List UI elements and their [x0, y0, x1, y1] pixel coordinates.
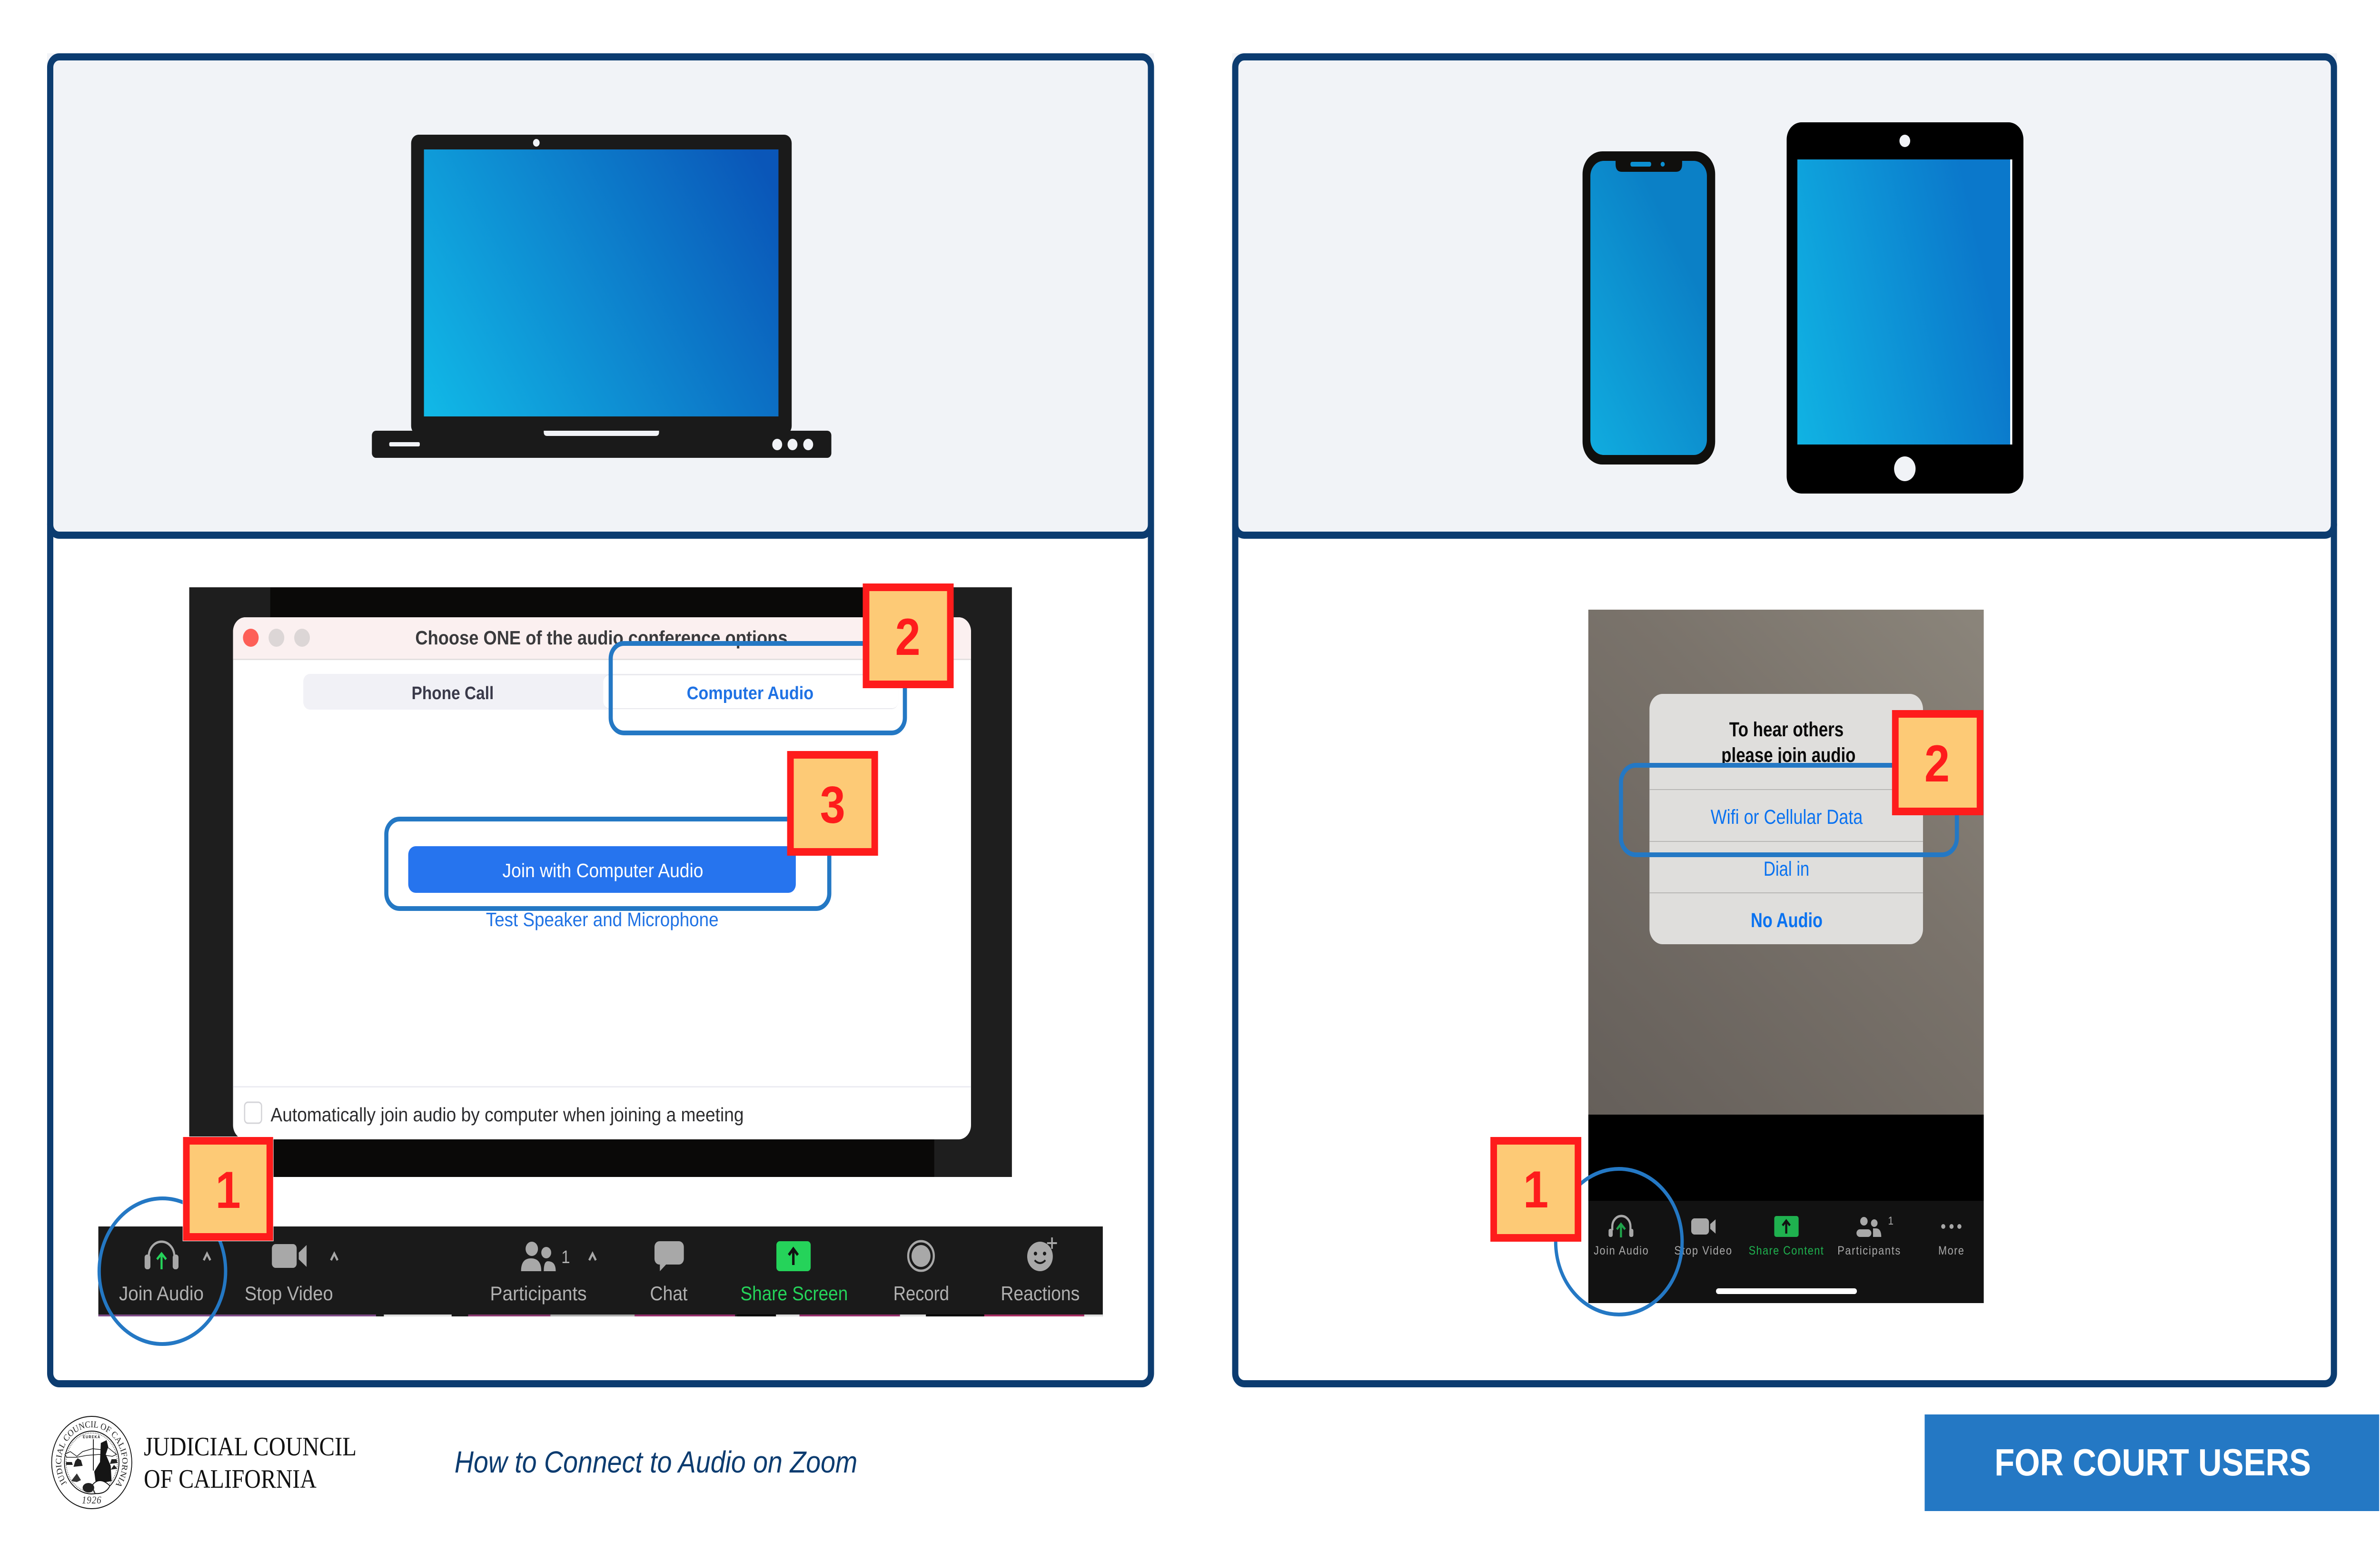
- highlight: computer audio tab: [611, 643, 905, 733]
- icon: headphones: [1608, 1216, 1633, 1237]
- icon: laptop: [372, 135, 832, 458]
- dialog window: Computer Audio: [687, 683, 813, 703]
- meeting toolbar: Chat: [650, 1283, 688, 1305]
- icon: participants: [521, 1242, 596, 1271]
- dialog window: Automatically join audio by computer when joining a meeting: [271, 1104, 744, 1126]
- icon: headphones: [145, 1242, 210, 1269]
- panel: mobile frame: [1235, 524, 2334, 1384]
- footer: title: How to Connect to Audio on Zoom: [455, 1445, 857, 1479]
- icon: participants: 1: [561, 1247, 570, 1267]
- badge: step 2: [866, 587, 951, 684]
- badge: step 2: 2: [895, 608, 921, 666]
- meeting toolbar: Reactions: [1001, 1283, 1080, 1305]
- badge: step 1: [1494, 1141, 1578, 1238]
- icon: tablet: [1786, 122, 2023, 494]
- icon: phone: [1583, 151, 1715, 465]
- dialog card: No Audio: [1751, 909, 1823, 932]
- dialog window: Phone Call: [412, 683, 494, 703]
- panel: mobile: [1232, 53, 2337, 1384]
- footer logo: judicial council seal: EUREKA: [83, 1435, 100, 1439]
- panel: computer: [47, 53, 1154, 1384]
- dialog card: please join audio: [1721, 744, 1855, 767]
- meeting toolbar: Record: [893, 1283, 949, 1305]
- screenshot: desktop audio dialog: [189, 587, 1012, 1177]
- footer: audience tag: [1924, 1414, 2379, 1511]
- icon: record: [908, 1241, 934, 1271]
- icon: share screen: [776, 1241, 811, 1271]
- footer: organisation name: [144, 1432, 357, 1494]
- dialog window: Test Speaker and Microphone: [486, 909, 719, 931]
- panel: computer frame: [50, 524, 1151, 1384]
- icon: reactions: [1027, 1237, 1057, 1271]
- mobile toolbar: Join Audio: [1594, 1244, 1648, 1257]
- badge: step 2: 2: [1924, 734, 1950, 792]
- highlight: join audio circle: [99, 1198, 226, 1344]
- footer: organisation name: JUDICIAL COUNCIL: [144, 1432, 357, 1462]
- icon: camera: [272, 1244, 337, 1268]
- mobile toolbar: Stop Video: [1674, 1244, 1732, 1257]
- home indicator: [1716, 1288, 1857, 1294]
- panel: mobile device header: [1232, 53, 2337, 535]
- mobile toolbar: Participants: [1837, 1244, 1900, 1257]
- icon: participants: [1856, 1215, 1894, 1237]
- dialog card: Dial in: [1764, 858, 1809, 880]
- dialog window: Join with Computer Audio: [503, 860, 703, 882]
- footer: audience tag: FOR COURT USERS: [1994, 1441, 2311, 1483]
- screenshot: mobile audio dialog: [1588, 610, 1984, 1303]
- meeting toolbar: Stop Video: [245, 1283, 333, 1305]
- highlight: wifi option: [1621, 765, 1957, 855]
- icon: share content: [1774, 1216, 1799, 1237]
- meeting toolbar: Share Screen: [741, 1283, 848, 1305]
- footer logo: judicial council seal: JUDICIAL COUNCIL OF CALIFORNIA: [54, 1419, 129, 1490]
- mobile toolbar: More: [1938, 1244, 1964, 1257]
- badge: step 2: [1895, 714, 1980, 811]
- panel: computer device header: [47, 53, 1154, 535]
- meeting toolbar: [99, 1226, 1103, 1316]
- mobile toolbar: [1594, 1215, 1964, 1294]
- dialog window: Choose ONE of the audio conference options: [415, 627, 788, 649]
- highlight: join audio circle: [1556, 1169, 1682, 1315]
- badge: step 1: 1: [1523, 1160, 1548, 1218]
- meeting toolbar: Join Audio: [119, 1283, 204, 1305]
- footer: organisation name: OF CALIFORNIA: [144, 1464, 317, 1494]
- meeting toolbar: Participants: [490, 1283, 587, 1305]
- dialog card: [1649, 694, 1923, 944]
- highlight: join button: [387, 819, 829, 909]
- mobile toolbar: Share Content: [1749, 1244, 1824, 1257]
- icon: camera: [1691, 1218, 1716, 1235]
- badge: step 3: 3: [820, 776, 845, 834]
- icon: more: [1941, 1224, 1962, 1229]
- badge: step 1: 1: [216, 1161, 241, 1219]
- dialog card: To hear others: [1729, 718, 1844, 741]
- icon: participants: 1: [1888, 1215, 1894, 1227]
- dialog window: [233, 617, 971, 1139]
- dialog card: Wifi or Cellular Data: [1711, 806, 1863, 829]
- badge: step 3: [791, 755, 875, 852]
- badge: step 1: [183, 1137, 274, 1241]
- icon: chat: [654, 1241, 684, 1271]
- footer logo: judicial council seal: 1926: [82, 1495, 102, 1506]
